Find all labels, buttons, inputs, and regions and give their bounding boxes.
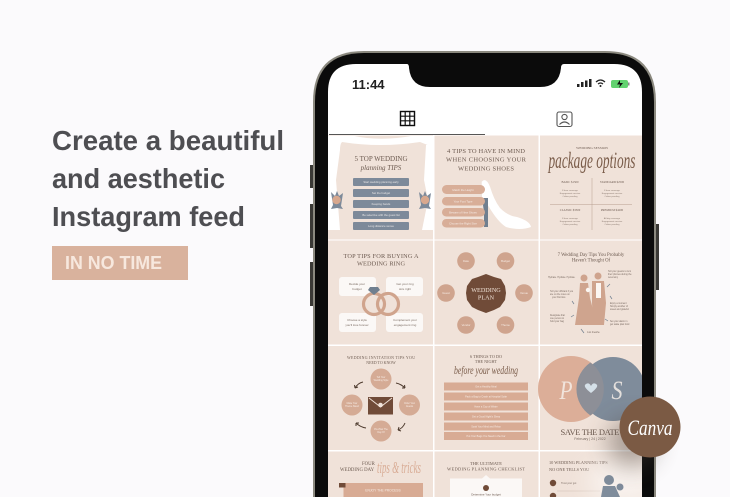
post: package options: PREMIUM $4200 xyxy=(601,208,624,212)
post: package options: CLASSIC $3500 xyxy=(560,208,581,212)
post: wedding invitation tips xyxy=(328,346,433,450)
headline: Instagram feed xyxy=(52,201,245,232)
post: wedding plan: WEDDING xyxy=(471,287,501,294)
canva badge xyxy=(620,396,680,458)
post: wedding invitation tips: Guests xyxy=(406,405,414,408)
post: save the date: SAVE THE DATE xyxy=(560,427,620,437)
tab: tagged icon xyxy=(557,112,572,126)
heart icon xyxy=(585,383,597,393)
post: wedding plan: Vendor xyxy=(462,323,470,327)
badge: in no time: IN NO TIME xyxy=(65,253,162,273)
post: 7 wedding day tips: Designate that xyxy=(550,314,565,317)
post grid background xyxy=(329,135,485,136)
post: before your wedding: THE NIGHT xyxy=(475,359,498,364)
post: wedding plan xyxy=(434,240,538,344)
post: package options: STANDARD $2500 xyxy=(600,180,625,184)
canva badge shadow xyxy=(608,418,656,466)
post: 7 wedding day tips: Simply another of xyxy=(610,305,628,308)
post: 7 wedding day tips: Just breathe xyxy=(587,331,600,334)
post: four wedding day tips and tricks xyxy=(328,452,433,497)
post: wedding plan: Venue xyxy=(520,291,528,295)
phone side buttons xyxy=(310,165,659,306)
post: package options: Online proofing xyxy=(563,195,578,198)
post: 7 wedding day tips: Haven't Thought Of xyxy=(572,258,611,264)
post: four wedding day tips and tricks: ENJOY THE PROCESS xyxy=(365,488,402,492)
post: 7 wedding day tips: your first kiss xyxy=(552,296,566,299)
post: 4 tips wedding shoes: Match the Height xyxy=(452,188,474,192)
post: 7 wedding day tips xyxy=(540,240,642,344)
post: package options: package options xyxy=(547,148,636,173)
headline xyxy=(52,125,284,232)
post: before your wedding: Have a Cup of Water xyxy=(474,406,498,408)
post: top tips for buying a wedding ring: Decide your xyxy=(349,282,365,286)
post: wedding plan: Date xyxy=(463,259,469,263)
post: top tips for buying a wedding ring: size right xyxy=(399,287,411,291)
post: 7 wedding day tips: Enjoy a moment xyxy=(610,302,627,305)
post: 7 wedding day tips: hold your bag xyxy=(550,320,565,323)
post: top tips for buying a wedding ring: budget xyxy=(352,287,362,291)
phone screen xyxy=(328,60,663,497)
post: package options: Engagement session xyxy=(560,192,581,195)
post: wedding invitation tips: Theme Stand xyxy=(345,405,360,408)
post: 5 top wedding planning tips: Long distance venue xyxy=(368,224,394,228)
post: package options: 8 hour coverage xyxy=(562,217,579,220)
post: wedding invitation tips: Make Your xyxy=(347,402,358,405)
post: package options: All day coverage xyxy=(604,217,621,220)
post: 4 tips wedding shoes: WHEN CHOOSING YOUR xyxy=(446,156,527,164)
post: top tips for buying a wedding ring: Choose a style xyxy=(347,318,367,322)
post: 7 wedding day tips: one person to xyxy=(550,317,565,320)
post: 4 tips wedding shoes: Beware of New Shoes xyxy=(449,210,477,214)
post: 5 top wedding planning tips: Be selective with the guest list xyxy=(362,213,400,217)
couple silhouette grey xyxy=(601,475,624,497)
post: wedding invitation tips: Tell Your xyxy=(377,376,386,379)
envelope icon xyxy=(368,397,393,414)
post: top tips for buying a wedding ring: Complement your xyxy=(393,318,417,322)
post: 4 tips wedding shoes: Your Foot Type xyxy=(454,199,473,203)
tab: grid icon xyxy=(400,112,414,126)
post: save the date: February | 24 | 2022 xyxy=(574,437,606,441)
post: 7 wedding day tips: Tell your guests to turn xyxy=(608,270,632,273)
post: save the date xyxy=(538,346,645,450)
post: 7 wedding day tips: Set your alarm in xyxy=(610,320,628,323)
post: 4 tips wedding shoes: WEDDING SHOES xyxy=(458,166,514,172)
post: before your wedding: Get a Healthy Meal xyxy=(475,386,497,388)
status bar icons xyxy=(577,79,630,88)
post: ultimate wedding planning checklist: WEDDING PLANNING CHECKLIST xyxy=(447,466,525,472)
post: package options: Engagement session xyxy=(602,220,623,223)
post: four wedding day tips and tricks: tips & tricks xyxy=(377,458,421,477)
post: 4 tips wedding shoes: Choose the Right Size xyxy=(449,221,477,225)
post: package options: Online proofing xyxy=(563,223,578,226)
canva badge: Canva xyxy=(628,415,672,440)
post: before your wedding: Soak Your Mind and Relax xyxy=(471,426,501,428)
post: save the date: S xyxy=(612,376,622,405)
post: top tips for buying a wedding ring: engagement ring xyxy=(394,323,417,327)
post: 10 wedding planning tips xyxy=(540,452,642,497)
post: 7 wedding day tips: are on the move on xyxy=(550,293,571,296)
post: ultimate wedding planning checklist xyxy=(434,452,538,497)
status bar time: 11:44 xyxy=(352,77,385,92)
post: before your wedding: 6 THINGS TO DO xyxy=(470,354,502,359)
post: before your wedding: Get a Good Night's Sleep xyxy=(472,416,501,418)
post: top tips for buying a wedding ring: TOP TIPS FOR BUYING A xyxy=(344,253,419,260)
post: ultimate wedding planning checklist: THE ULTIMATE xyxy=(470,461,502,466)
shoe xyxy=(482,180,531,229)
post: 5 top wedding planning tips: 5 TOP WEDDING xyxy=(354,155,408,163)
post: four wedding day tips and tricks: WEDDING DAY xyxy=(340,468,375,473)
post: wedding invitation tips: Wedding Style xyxy=(374,379,389,382)
post: 10 wedding planning tips: NO ONE TELLS YOU xyxy=(549,467,590,472)
headline: and aesthetic xyxy=(52,163,225,194)
post: 7 wedding day tips: Tell your officiant if you xyxy=(550,290,574,293)
post: before your wedding: Put Your Bags You Need in the Car xyxy=(467,435,506,438)
post: wedding plan: PLAN xyxy=(478,294,495,302)
phone mockup xyxy=(310,51,663,497)
post: wedding invitation tips: NEED TO KNOW xyxy=(366,361,396,365)
post: top tips for buying a wedding ring xyxy=(328,240,433,344)
post: package options: Engagement session xyxy=(602,192,623,195)
post: package options: Engagement session xyxy=(560,220,581,223)
flower left xyxy=(331,191,343,209)
post: four wedding day tips and tricks: FOUR xyxy=(362,462,376,467)
post: package options: 8 hour coverage xyxy=(604,189,621,192)
post: save the date: P xyxy=(559,376,573,405)
post: 7 wedding day tips: get wake plan food xyxy=(610,323,630,326)
post: wedding plan: Budget xyxy=(501,259,510,263)
post: before your wedding: before your wedding xyxy=(454,363,518,377)
post: 7 wedding day tips: ceremony xyxy=(608,276,619,279)
cycle arrows xyxy=(354,382,405,431)
post: 4 tips wedding shoes xyxy=(434,136,538,240)
post: package options xyxy=(540,136,642,240)
post: 4 tips wedding shoes: 4 TIPS TO HAVE IN MIND xyxy=(447,148,525,155)
post: 5 top wedding planning tips: Start wedding planning early xyxy=(363,180,399,184)
post: package options: WEDDING SESSION xyxy=(576,146,608,150)
post: top tips for buying a wedding ring: WEDDING RING xyxy=(357,260,405,268)
post: 10 wedding planning tips: Trust your gut xyxy=(561,482,577,485)
light glow over lower right post xyxy=(578,459,642,497)
badge: in no time xyxy=(52,246,188,280)
rings icon xyxy=(364,287,398,314)
post: wedding plan: Theme xyxy=(501,323,510,327)
post: package options: Online proofing xyxy=(605,223,620,226)
post: package options: 8 hour coverage xyxy=(562,189,579,192)
flower right xyxy=(419,191,431,209)
post: before your wedding: Pack a Bag to Crash at Hospital Suite xyxy=(465,396,508,398)
post: package options: BASIC $1500 xyxy=(561,180,579,184)
post: wedding invitation tips: Pre-Plan The xyxy=(374,428,388,431)
post: 10 wedding planning tips: 10 WEDDING PLANNING TIPS xyxy=(549,460,608,465)
post: wedding plan: Guest xyxy=(442,291,450,295)
post: before your wedding xyxy=(434,346,538,450)
couple silhouette xyxy=(575,272,606,325)
post: 5 top wedding planning tips: Set the budget xyxy=(372,191,390,195)
post: ultimate wedding planning checklist: Determine Your budget xyxy=(471,492,501,496)
phone body xyxy=(313,51,656,497)
headline: Create a beautiful xyxy=(52,125,284,156)
post: 5 top wedding planning tips: Keeping hands xyxy=(372,202,391,206)
post: 7 wedding day tips: 7 Wedding Day Tips You Probably xyxy=(558,253,625,258)
post: 7 wedding day tips: their phones during the xyxy=(608,273,632,276)
post: 7 wedding day tips: Hydrate. Hydrate. Hydrate. xyxy=(548,276,576,279)
post: 7 wedding day tips: sweet and grateful xyxy=(610,308,629,311)
post: wedding invitation tips: Order Your xyxy=(404,402,415,405)
post: wedding invitation tips: WEDDING INVITATION TIPS YOU xyxy=(347,356,415,360)
active tab underline xyxy=(329,134,485,135)
post: package options: Online proofing xyxy=(605,195,620,198)
post: top tips for buying a wedding ring: you'll love forever xyxy=(345,323,369,327)
post: 5 top wedding planning tips xyxy=(328,136,433,240)
post: top tips for buying a wedding ring: Get your ring xyxy=(396,282,414,286)
post: 5 top wedding planning tips: planning TIPS xyxy=(360,164,402,172)
post: wedding invitation tips: Day Of xyxy=(377,432,385,434)
